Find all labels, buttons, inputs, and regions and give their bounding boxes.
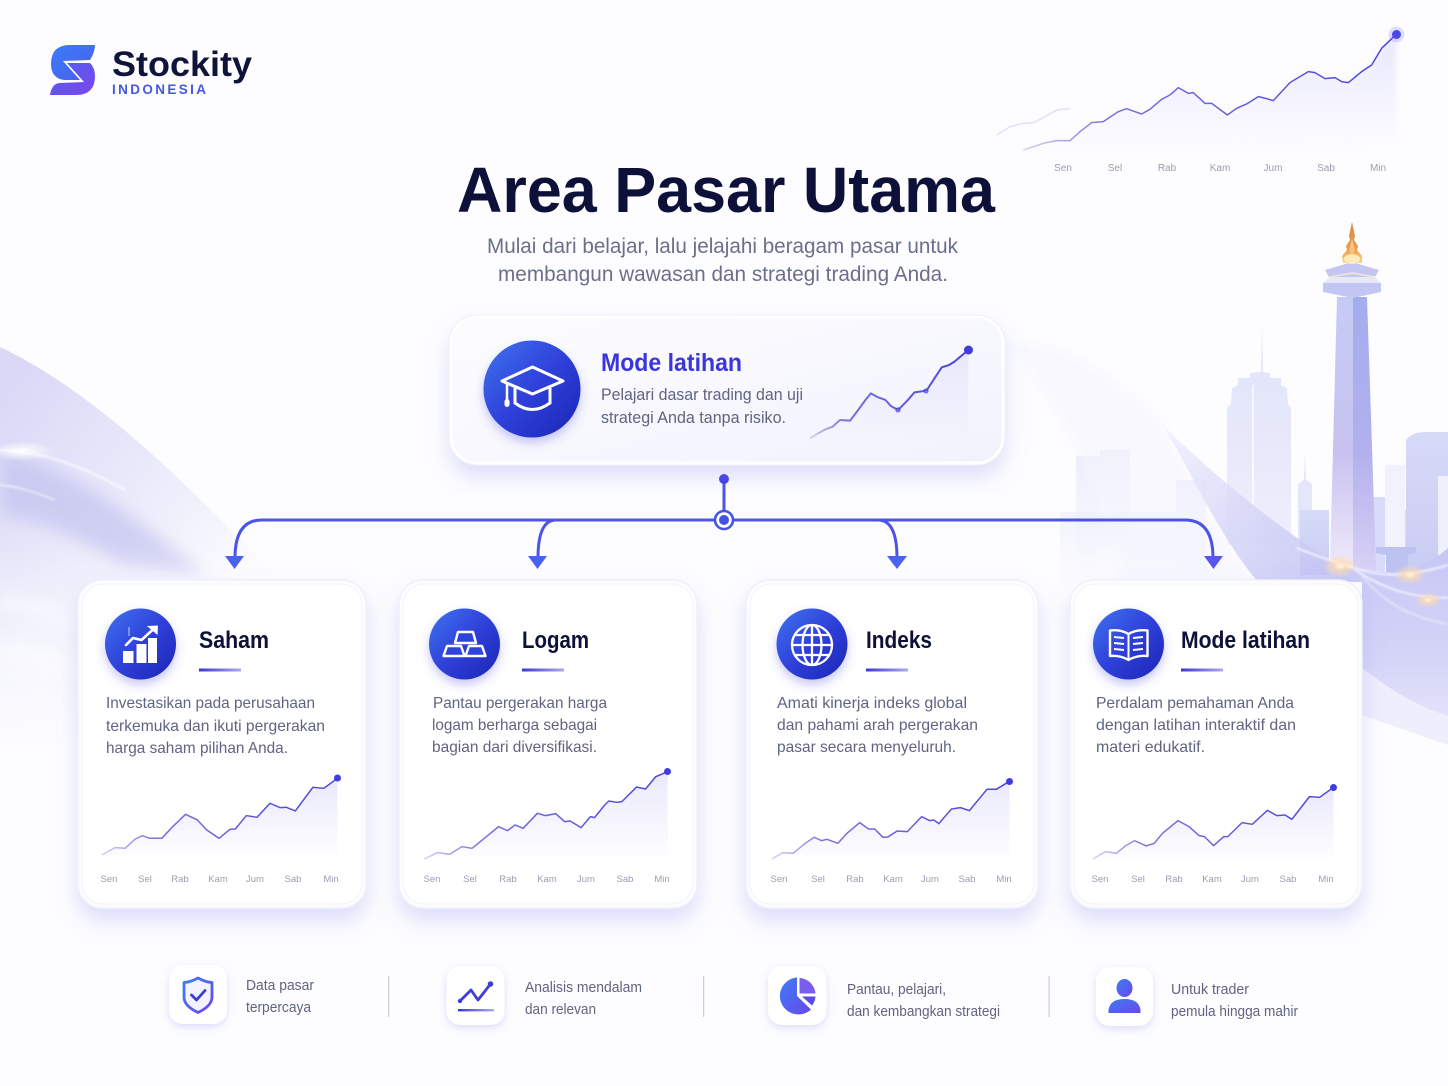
panel: hero Mode latihan [449,315,1005,465]
icon: open book [1093,608,1164,680]
top decorative line chart: Sel [1108,163,1122,174]
description [1096,695,1296,756]
line chart [424,768,671,885]
feature: Analisis mendalam: Analisis mendalam [525,980,642,996]
heading underline [866,668,908,672]
description: dengan latihan interaktif dan [1096,717,1296,734]
line chart: Rab [499,874,517,885]
line chart: Sen [1092,874,1108,885]
top decorative line chart: Sab [1317,163,1335,174]
brand name: Stockity [112,45,253,84]
panel: Logam [399,580,697,908]
description [601,386,803,427]
line chart: Min [323,874,339,885]
icon: person [1108,979,1140,1013]
description: harga saham pilihan Anda. [106,740,288,757]
feature: Pantau, pelajari: dan kembangkan strategi [847,1004,1000,1020]
line chart: Sen [771,874,787,885]
description: dan pahami arah pergerakan [777,717,978,734]
heading underline [199,668,241,672]
heading: Mode latihan [1181,627,1310,654]
line chart: Sab [1280,874,1296,885]
subtitle: Mulai dari belajar, lalu jelajahi beragam pasar untuk [487,235,958,258]
panel: Mode latihan [1070,580,1362,908]
arrow: Indeks [887,556,907,569]
connector tree [225,474,1223,569]
line chart: Jum [577,874,595,885]
panel: Indeks [746,580,1038,908]
line chart: Min [654,874,670,885]
line chart: Sel [138,874,152,885]
feature: Analisis mendalam [446,966,642,1025]
description: Pelajari dasar trading dan uji [601,386,803,404]
description [432,695,607,756]
description: Pantau pergerakan harga [433,695,607,712]
brand subtitle: INDONESIA [112,82,206,97]
heading: Mode latihan [601,349,742,377]
heading: Indeks [866,627,932,654]
feature: Data pasar terpercaya [169,965,314,1024]
icon: trend line [458,981,494,1011]
line chart [771,778,1013,885]
feature: Data pasar terpercaya: Data pasar [246,978,314,994]
feature: Data pasar terpercaya: terpercaya [246,1000,312,1016]
hero line chart [810,346,973,442]
line chart: Min [996,874,1012,885]
arrow: Mode latihan [1204,556,1223,569]
line chart: Sab [617,874,633,885]
Monas monument [1323,222,1381,582]
top decorative line chart: Sen [1054,163,1072,174]
line chart: Rab [1165,874,1183,885]
feature: Untuk trader: pemula hingga mahir [1171,1004,1298,1020]
line chart: Jum [921,874,939,885]
right decorative wave [1005,343,1448,745]
top decorative line chart [997,26,1404,174]
line chart: Sen [424,874,440,885]
icon: globe [776,608,848,680]
top decorative line chart: Min [1370,163,1386,174]
line chart: Kam [1202,874,1222,885]
line chart [101,774,341,885]
description: materi edukatif. [1096,739,1205,756]
panel: Saham [78,580,366,908]
feature: Analisis mendalam: dan relevan [525,1002,596,1018]
feature: Untuk trader: Untuk trader [1171,982,1249,998]
description [106,695,325,757]
feature: Pantau, pelajari: Pantau, pelajari, [847,982,946,998]
line chart: Jum [246,874,264,885]
skyline silhouettes [1060,327,1448,582]
line chart: Sel [1131,874,1145,885]
description: strategi Anda tanpa risiko. [601,409,786,427]
line chart: Kam [537,874,557,885]
logo mark [50,45,95,95]
description [777,695,978,756]
arrow: Logam [528,556,547,569]
description: logam berharga sebagai [432,717,597,734]
feature: Pantau, pelajari [768,966,1000,1025]
line chart: Jum [1241,874,1259,885]
left decorative wave [0,347,220,645]
icon: shield [184,978,212,1012]
line chart: Sab [959,874,975,885]
arrow: Saham [225,556,244,569]
description: bagian dari diversifikasi. [432,739,597,756]
top decorative line chart: Kam [1210,163,1230,174]
top decorative line chart: Rab [1158,163,1177,174]
heading underline [522,668,564,672]
subtitle: membangun wawasan dan strategi trading Anda. [498,263,948,286]
line chart: Kam [208,874,228,885]
icon: rising bar chart [105,608,176,680]
line chart: Rab [846,874,864,885]
line chart: Sel [463,874,477,885]
line chart: Sen [101,874,117,885]
icon: pie chart [780,978,816,1014]
heading: Saham [199,627,269,654]
heading underline [1181,668,1223,672]
title: Area Pasar Utama [457,154,995,226]
description: Amati kinerja indeks global [777,695,967,712]
line chart [1092,784,1337,885]
feature: Untuk trader [1096,967,1298,1026]
subtitle [487,235,958,286]
line chart: Min [1318,874,1334,885]
line chart: Sel [811,874,825,885]
line chart: Kam [883,874,903,885]
top decorative line chart: Jum [1264,163,1282,174]
description: pasar secara menyeluruh. [777,739,956,756]
description: terkemuka dan ikuti pergerakan [106,718,325,735]
description: Perdalam pemahaman Anda [1096,695,1294,712]
line chart: Rab [171,874,189,885]
line chart: Sab [285,874,301,885]
icon: graduation cap [484,340,580,438]
icon: gold bars [429,608,500,680]
description: Investasikan pada perusahaan [106,695,315,712]
logo [50,45,253,97]
heading: Logam [522,627,589,654]
